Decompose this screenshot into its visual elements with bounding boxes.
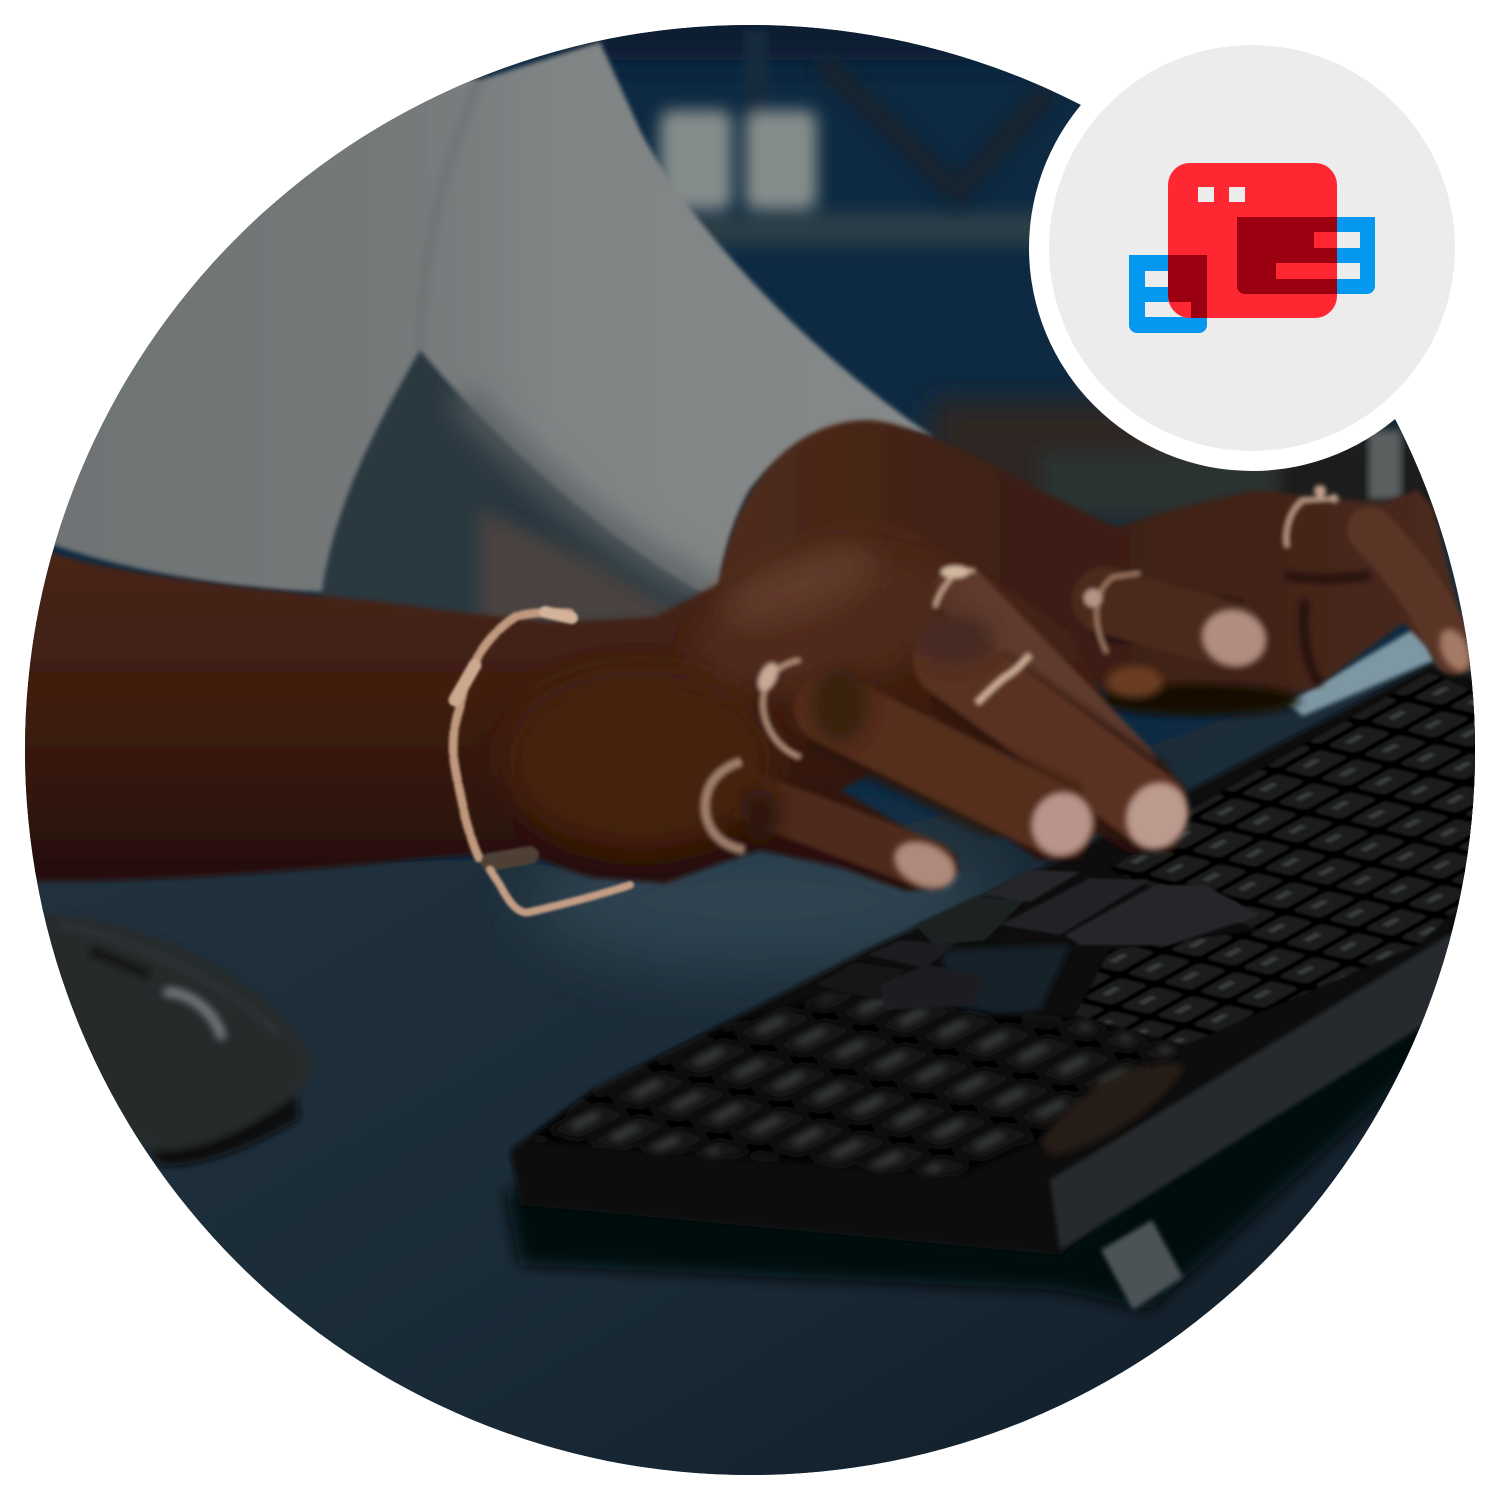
gold bracelet bbox=[453, 612, 630, 913]
grey sleeve bbox=[0, 42, 935, 600]
palm blend bbox=[505, 670, 775, 850]
key grid: numpad cluster bbox=[530, 990, 1180, 1175]
large keys bbox=[815, 870, 1260, 1010]
finger A shadow bbox=[830, 712, 1060, 825]
right hand nail bbox=[1196, 603, 1272, 673]
torso shadow gap bbox=[320, 352, 698, 615]
icon: overlapping windows bbox=[1129, 163, 1375, 333]
icon badge: grey disc bbox=[1049, 45, 1455, 451]
background: pale objects on shelf bbox=[660, 110, 732, 210]
keyboard side rim bbox=[1050, 925, 1465, 1250]
right hand finger bbox=[1370, 530, 1455, 652]
right hand palm patch bbox=[1107, 666, 1163, 698]
icon: blue right panel bbox=[1237, 217, 1375, 294]
far finger bbox=[960, 590, 1130, 765]
desk highlight bbox=[530, 830, 990, 970]
keyboard dial bbox=[1040, 1063, 1185, 1155]
thumb bbox=[745, 795, 930, 865]
warm gap between torso and arm bbox=[475, 510, 672, 624]
right hand rings bbox=[1286, 498, 1333, 547]
icon: dark overlap right bbox=[1237, 217, 1337, 294]
sleeve lower shadow bbox=[460, 395, 715, 595]
rings bbox=[935, 570, 975, 607]
keyboard bbox=[505, 665, 1490, 1310]
paper sliver bbox=[1287, 627, 1435, 716]
desk surface bbox=[0, 620, 1500, 1500]
icon: blue left panel bbox=[1129, 255, 1207, 333]
finger B shadow bbox=[950, 665, 1150, 805]
keyboard deck between clusters bbox=[940, 945, 1070, 1025]
icon badge: white ring bbox=[1029, 25, 1475, 471]
keyboard body bbox=[510, 665, 1490, 1255]
keyboard shadow bbox=[505, 920, 1480, 1310]
right hand thumb bbox=[1105, 600, 1232, 640]
hand back blend bbox=[679, 533, 961, 717]
hand highlight bbox=[715, 531, 885, 639]
keyboard foot bbox=[1101, 1220, 1183, 1310]
fingernails bbox=[887, 833, 963, 897]
right hand crease bbox=[1285, 575, 1370, 685]
computer mouse bbox=[20, 915, 313, 1166]
right hand shadow bbox=[1100, 684, 1300, 716]
right arm and hand bbox=[716, 420, 1476, 716]
left arm and hand bbox=[0, 517, 1199, 897]
finger A bbox=[830, 708, 1060, 822]
icon: dark overlap left bbox=[1168, 255, 1207, 318]
icon: red window bbox=[1168, 163, 1337, 318]
sleeve fold bbox=[478, 78, 480, 79]
key grid: main cluster bbox=[1075, 672, 1480, 1045]
knuckle shading bbox=[915, 614, 995, 666]
finger B bbox=[950, 660, 1150, 808]
